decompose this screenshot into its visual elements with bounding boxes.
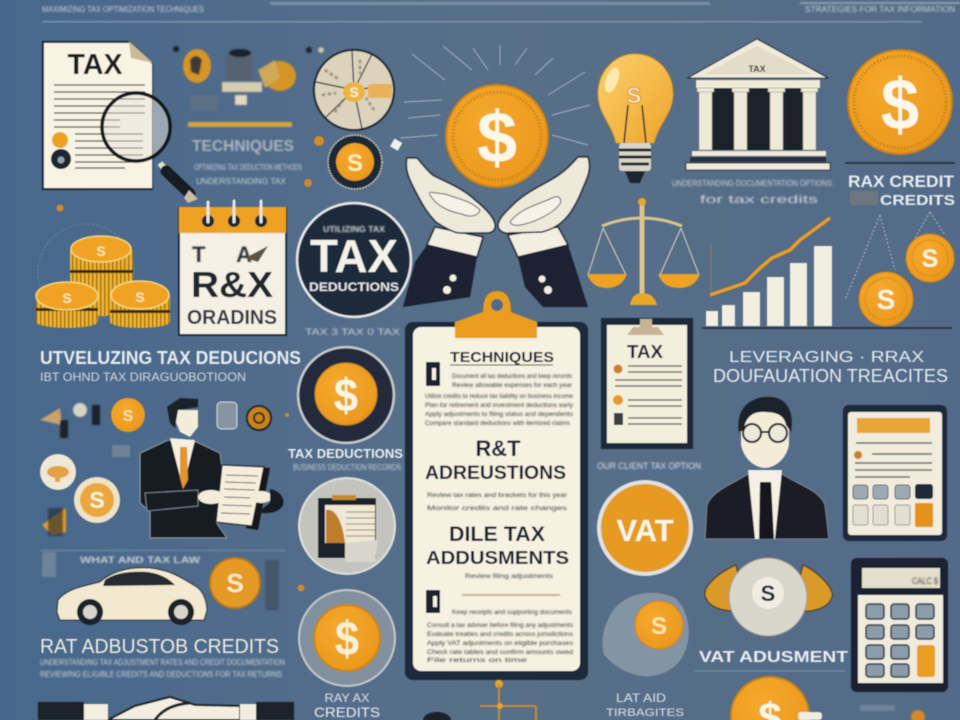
icon: calendar: ORADINS <box>187 307 277 329</box>
heading: rate adjustments credits <box>40 636 285 679</box>
panel: small tax clipboard: TAX <box>627 342 663 362</box>
icon: tax document with magnifier: TAX <box>68 49 123 81</box>
icon: lower scale fragment <box>423 680 536 720</box>
icon: stack of coins: S <box>96 243 106 259</box>
heading: tax credit <box>845 163 955 209</box>
text: technique notes <box>425 373 574 427</box>
icon: calendar: R&X <box>191 264 273 305</box>
text: techniques caption: OPTIMIZING TAX DEDUCTION METHODS <box>194 163 302 172</box>
text: techniques caption <box>192 138 302 186</box>
icon: glass sphere coin <box>602 593 689 676</box>
text: for tax credits caption <box>672 179 832 206</box>
text: closing notes <box>427 609 574 664</box>
text: tax credits label: CREDITS <box>314 704 380 720</box>
icon: large dollar coin <box>446 85 548 187</box>
icon: bottom right small coin <box>860 705 925 720</box>
heading: rate adjustments <box>425 436 566 484</box>
caption: small label left of vat: OUR CLIENT TAX OPTION <box>597 461 701 471</box>
icon: circled coin: $ <box>335 613 359 666</box>
figure: businessman with paper <box>140 398 283 538</box>
heading: leveraging treaties <box>713 349 948 386</box>
icon cluster: blurred techniques artwork <box>173 46 324 127</box>
text: technique notes: Compare standard deductions with itemized claims <box>425 420 571 427</box>
icon: dollar coin top right: $ <box>881 65 919 145</box>
text: small caption below calendar: TAX 3 TAX 0 TAX <box>305 327 400 337</box>
badge: tax deductions: TAX <box>310 230 398 282</box>
heading: utilizing tax deductions <box>40 348 301 384</box>
panel: calculator <box>851 558 948 692</box>
icon: ringed dollar coin: $ <box>334 369 358 421</box>
text: technique notes: Apply adjustments to filing status and dependents <box>425 411 574 418</box>
heading: tax adjustments: ADDUSMENTS <box>426 548 569 568</box>
heading: tax credit: RAX CREDIT <box>848 172 955 191</box>
heading: tax adjustments: DILE TAX <box>449 523 545 546</box>
icon: handshake <box>38 697 294 720</box>
heading: tax deduction small: BUSINESS DEDUCTION RECORDS <box>293 463 401 472</box>
badge: tax deductions <box>297 203 411 317</box>
icon: small coin: S <box>347 150 363 177</box>
text: rate notes: Review tax rates and brackets for this year <box>427 492 568 499</box>
panel: calculator: CALC $ <box>912 576 938 586</box>
text: closing notes: File returns on time <box>427 657 528 664</box>
header strip: STRATEGIES FOR TAX INFORMATION <box>805 5 955 14</box>
icon: balance scale <box>587 198 700 305</box>
text: technique notes: Utilize credits to reduce tax liability on business income <box>425 393 573 400</box>
icon: hanging coins: S <box>922 245 938 273</box>
heading: leveraging treaties: LEVERAGING · RRAX <box>729 349 924 366</box>
icon: lightbulb with dollar: S <box>627 83 641 108</box>
icon: segmented wheel with coins <box>314 50 394 130</box>
header strip: MAXIMIZING TAX OPTIMIZATION TECHNIQUES <box>42 5 204 14</box>
figure: businessman with glasses <box>705 397 829 539</box>
icon: calendar <box>178 201 287 336</box>
icon: government bank building <box>686 39 830 170</box>
badge: tax deductions: UTILIZING TAX <box>323 225 386 234</box>
icon cluster: left deduction artwork: S <box>89 487 105 513</box>
text: adjustment summary <box>462 573 560 595</box>
header strip <box>42 2 960 22</box>
text: vat and treaties label: LAT AID <box>616 691 666 705</box>
icon: laurel coin <box>705 558 832 636</box>
icon: right hand <box>498 157 589 307</box>
heading: leveraging treaties: DOUFAUATION TREACITES <box>713 366 948 386</box>
icon: left hand <box>403 158 495 307</box>
text: tax credits label <box>314 691 380 720</box>
text: vat and treaties label <box>606 691 684 719</box>
icon: large dollar coin: $ <box>477 98 517 178</box>
panel: main checklist clipboard <box>405 291 588 680</box>
icon cluster: left deduction artwork <box>40 398 289 536</box>
icon: bottom dollar coin <box>731 677 822 720</box>
icon: hanging coins: S <box>877 284 895 315</box>
icon: stack of coins: S <box>62 290 72 306</box>
heading: tax credit: CREDITS <box>880 192 955 209</box>
chart: rising bar chart <box>702 218 952 328</box>
text: techniques caption: TECHNIQUES <box>192 138 294 155</box>
icon: orange clip <box>455 291 537 338</box>
badge: tax deductions: DEDUCTIONS <box>309 280 399 294</box>
icon: calendar: T A <box>192 242 252 267</box>
heading: rate adjustments: R&T <box>476 436 521 461</box>
text: rate notes <box>427 492 568 512</box>
text: closing notes: Evaluate treaties and credits across jurisdictions <box>427 631 574 638</box>
heading: tax adjustments <box>426 523 569 568</box>
icon: dollar coin top right <box>848 50 952 154</box>
badge: vat <box>599 482 691 574</box>
icon: bullet one <box>426 362 440 386</box>
text: technique notes: Document all tax deductions and keep records <box>452 373 573 380</box>
icon: government bank building: TAX <box>748 64 766 74</box>
text: vat adjustment heading: VAT ADUSMENT <box>699 649 848 666</box>
icon: radiating rays <box>400 45 590 145</box>
heading: tax deduction small <box>288 446 403 472</box>
text: for tax credits caption: UNDERSTANDING DOCUMENTATION OPTIONS <box>672 179 832 188</box>
icon: stack of coins: S <box>135 289 145 305</box>
icon: stack of coins <box>36 224 170 328</box>
text: adjustment summary: Review filing adjustments <box>465 573 554 580</box>
text: technique notes: Plan for retirement and investment deductions early <box>425 402 574 409</box>
heading: techniques: TECHNIQUES <box>450 349 554 366</box>
heading: rate adjustments credits: REVIEWING ELIGIBLE CREDITS AND DEDUCTIONS FOR TAX RETURNS <box>40 670 282 679</box>
text: closing notes: Apply VAT adjustments on eligible purchases <box>427 640 574 647</box>
icon: circled coin <box>299 590 395 686</box>
text: techniques caption: UNDERSTANDING TAX <box>196 177 287 186</box>
icon: records circle <box>299 478 395 574</box>
text: closing notes: Keep receipts and supporting documents <box>452 609 573 616</box>
icon: hanging coins <box>845 212 954 326</box>
panel: small tax clipboard <box>601 318 693 449</box>
icon: lightbulb with dollar <box>598 54 673 183</box>
icon: car with coin backdrop <box>40 550 304 627</box>
text: for tax credits caption: for tax credits <box>700 194 819 206</box>
badge: vat: VAT <box>616 513 674 548</box>
heading: rate adjustments credits: RAT ADBUSTOB CREDITS <box>40 636 279 658</box>
icon: ringed dollar coin <box>298 347 394 443</box>
icon: car with coin backdrop: S <box>226 568 244 598</box>
icon cluster: left deduction artwork: S <box>123 408 134 425</box>
icon: car with coin backdrop: WHAT AND TAX LAW <box>80 555 201 565</box>
icon: small coin <box>328 135 382 189</box>
icon: tax document with magnifier <box>42 41 198 203</box>
text: technique notes: Review allowable expenses for each year <box>452 382 573 389</box>
text: closing notes: Check rate tables and confirm amounts owed <box>427 649 573 656</box>
decorative dots <box>56 136 402 212</box>
icon: bullet two <box>426 590 440 613</box>
text: rate notes: Monitor credits and rate changes <box>427 505 568 512</box>
text: closing notes: Consult a tax adviser before filing any adjustments <box>427 622 574 629</box>
icon: glass sphere coin: S <box>651 613 667 640</box>
panel: calculator card <box>843 405 947 541</box>
icon: laurel coin: S <box>761 581 775 606</box>
heading: rate adjustments credits: UNDERSTANDING TAX ADJUSTMENT RATES AND CREDIT DOCUMENTATION <box>40 658 285 667</box>
icon: segmented wheel with coins: S <box>349 84 359 100</box>
heading: utilizing tax deductions: IBT OHND TAX DIRAGUOBOTIOON <box>40 370 246 384</box>
heading: tax deduction small: TAX DEDUCTIONS <box>288 446 403 461</box>
text: vat and treaties label: TIRBAGITES <box>606 707 684 719</box>
heading: utilizing tax deductions: UTVELUZING TAX DEDUCIONS <box>40 348 301 368</box>
text: tax credits label: RAY AX <box>324 691 370 705</box>
heading: rate adjustments: ADREUSTIONS <box>425 463 566 484</box>
